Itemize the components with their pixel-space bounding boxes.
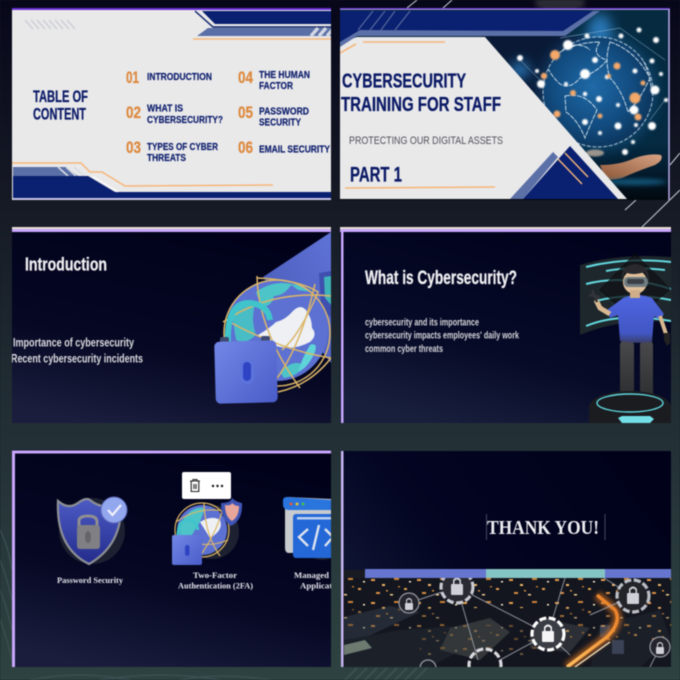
icon: 2FA globe with lock and shield — [172, 498, 242, 565]
contents numbers: 03 — [126, 139, 141, 157]
label: two-factor authentication — [178, 570, 253, 591]
title: CYBERSECURITY — [342, 70, 466, 92]
icon: more dots — [212, 485, 223, 487]
heading: introduction: Introduction — [25, 255, 107, 275]
contents labels: TYPES OF CYBER — [147, 141, 218, 153]
label: two-factor authentication: Authentication (2FA) — [178, 581, 253, 591]
label: managed web application: Managed Web — [294, 570, 348, 580]
slide frame — [340, 9, 669, 200]
city photo with network of locks — [344, 570, 671, 680]
bullet text: Recent cybersecurity incidents — [11, 352, 143, 366]
top border — [12, 8, 331, 10]
bullet text — [11, 336, 143, 366]
bottom triangle decoration — [510, 146, 618, 199]
top and left border — [340, 227, 671, 423]
light trail road — [567, 595, 617, 667]
contents labels: PASSWORD — [259, 106, 309, 118]
heading: what is cybersecurity: What is Cybersecurity? — [365, 268, 517, 289]
bullet text: common cyber threats — [365, 344, 443, 355]
contents labels: THE HUMAN — [259, 69, 310, 81]
holographic screen — [580, 254, 671, 335]
slide 3: introduction — [11, 227, 331, 423]
heading: table of content — [32, 90, 88, 120]
globe photo — [510, 14, 668, 155]
dark panel behind diagonal — [481, 36, 584, 102]
label: password security: Password Security — [57, 575, 124, 585]
bottom left navy banner — [12, 163, 331, 200]
slide 4: what is cybersecurity — [340, 227, 671, 423]
top border — [12, 227, 331, 232]
top and left border — [14, 452, 331, 667]
contents labels: SECURITY — [259, 117, 301, 129]
contents labels: INTRODUCTION — [147, 71, 212, 83]
icon: shield behind globe — [319, 271, 331, 318]
icon: trash — [190, 480, 200, 492]
label: managed web application: Application — [300, 581, 344, 591]
icon: globe with lock — [214, 276, 331, 404]
slide 5: security topics — [12, 450, 348, 667]
left border — [341, 451, 344, 667]
title — [340, 72, 502, 112]
thank you text: THANK YOU! — [487, 518, 599, 539]
slide 2: title slide — [340, 8, 670, 200]
hatch decoration — [25, 20, 75, 29]
bullet text: cybersecurity impacts employees' daily work — [365, 331, 519, 342]
bullet text: cybersecurity and its importance — [365, 317, 479, 328]
heading: table of content: CONTENT — [33, 104, 86, 124]
colour bar — [365, 569, 671, 578]
icon: padlock — [214, 303, 278, 404]
slide 1: table of content — [12, 8, 334, 200]
contents numbers: 02 — [126, 104, 141, 122]
heading: table of content: TABLE OF — [33, 87, 88, 106]
orange underline — [345, 187, 495, 188]
contents labels: THREATS — [147, 152, 186, 164]
contents labels — [147, 69, 330, 164]
bullet text: Importance of cybersecurity — [13, 336, 134, 350]
white diagonal panel — [340, 37, 627, 199]
floating toolbar — [182, 472, 231, 499]
lock nodes — [441, 571, 649, 680]
slide 6: thank you — [341, 451, 671, 680]
top navy band — [340, 11, 600, 53]
platform — [589, 391, 671, 423]
label: two-factor authentication: Two-Factor — [193, 570, 237, 580]
icon: password shield — [58, 497, 127, 564]
person with VR headset — [589, 264, 670, 405]
contents numbers — [126, 69, 254, 157]
subtitle: PROTECTING OUR DIGITAL ASSETS — [349, 135, 503, 147]
network links — [409, 578, 660, 667]
icon: gold wire cage — [223, 276, 331, 392]
contents labels: CYBERSECURITY? — [147, 114, 223, 126]
contents labels: WHAT IS — [147, 103, 183, 115]
contents labels: EMAIL SECURITY — [259, 144, 330, 156]
bullet text — [365, 317, 519, 355]
contents numbers: 04 — [238, 69, 254, 87]
icon: browser window with code — [283, 497, 342, 560]
contents numbers: 01 — [126, 69, 139, 87]
contents numbers: 05 — [238, 104, 253, 122]
contents numbers: 06 — [238, 139, 253, 157]
contents labels: FACTOR — [259, 80, 293, 92]
part label: PART 1 — [350, 163, 402, 187]
top right navy banner — [193, 11, 334, 39]
label: managed web application — [294, 570, 348, 591]
open hand under globe — [600, 154, 662, 180]
title: TRAINING FOR STAFF — [341, 93, 501, 116]
blue light beam — [263, 232, 331, 363]
